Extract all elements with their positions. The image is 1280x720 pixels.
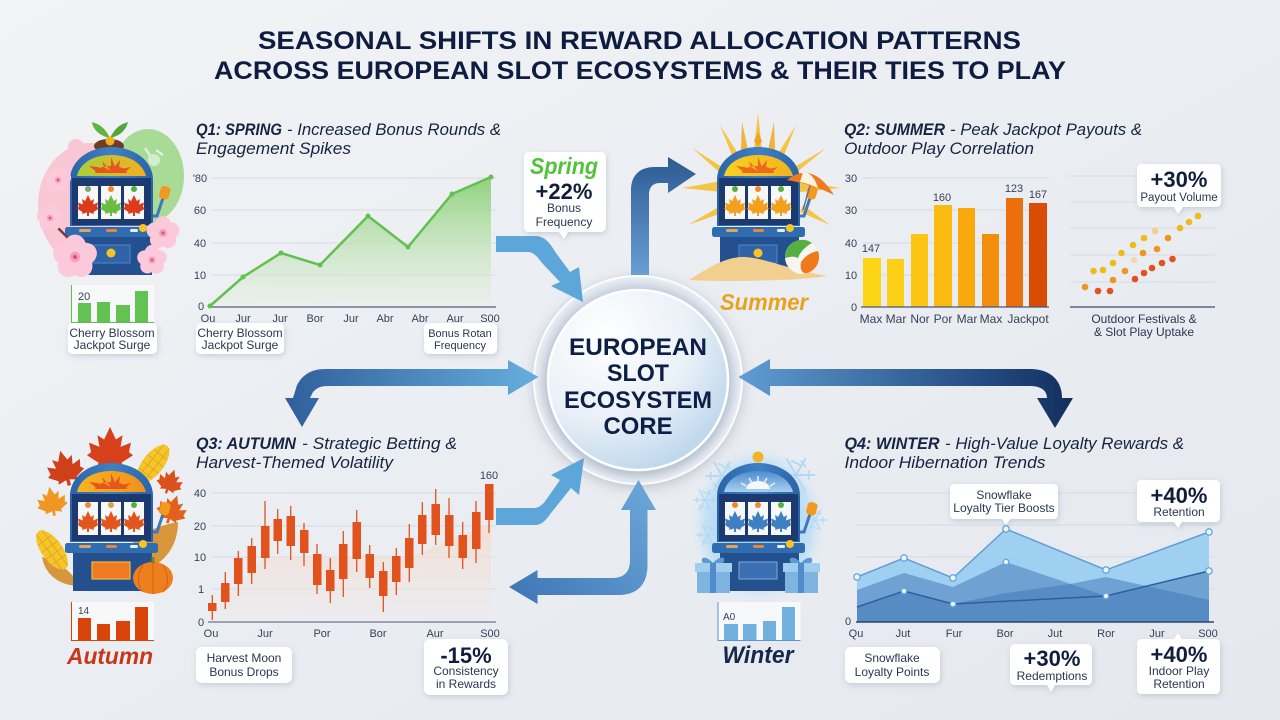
central core circle: ECOSYSTEM — [564, 387, 712, 414]
callout: +40% retention — [1137, 480, 1220, 528]
callout: spring +22%: +22% — [536, 179, 592, 204]
callout: cherry blossom right: Cherry Blossom — [197, 326, 283, 340]
label: Winter: Winter — [722, 642, 795, 669]
chart: autumn mini bars: 14 — [78, 606, 90, 617]
callout: harvest moon: Harvest Moon — [207, 651, 281, 665]
arrow: core to autumn double-headed — [285, 360, 538, 427]
chart: summer bar chart: 40 — [845, 238, 857, 250]
title: ACROSS EUROPEAN SLOT ECOSYSTEMS & THEIR TIES TO PLAY — [214, 57, 1066, 85]
chart: autumn candlesticks: 0 — [198, 617, 204, 629]
callout: -15% consistency: in Rewards — [436, 677, 496, 691]
callout: +30% redemptions: Redemptions — [1017, 669, 1087, 683]
chart: summer bar chart: 123 — [1005, 183, 1023, 195]
central core circle: EUROPEAN — [569, 334, 707, 361]
panel: Q4 winter — [688, 434, 1220, 694]
heading: Q3: Harvest-Themed Volatility — [196, 453, 395, 472]
chart: winter mini bars — [718, 602, 800, 641]
chart: spring line chart: 0 — [198, 301, 204, 313]
callout: snowflake loyalty points — [845, 647, 940, 683]
callout: -15% consistency: -15% — [440, 643, 492, 668]
chart: spring line chart: 60 — [194, 205, 206, 217]
arrow: core to winter double-headed — [738, 359, 1073, 428]
chart: spring mini bars: 20 — [78, 291, 90, 303]
callout: cherry blossom left: Jackpot Surge — [74, 338, 151, 352]
chart: spring line chart: Jur — [272, 313, 288, 325]
chart: autumn candlesticks: 40 — [194, 488, 206, 500]
chart: winter layered area: Bor — [996, 628, 1014, 640]
heading: Q2: - Peak Jackpot Payouts & — [950, 120, 1142, 139]
heading: Q1: Engagement Spikes — [196, 139, 352, 158]
chart: autumn candlesticks: 160 — [480, 470, 498, 482]
callout: snowflake loyalty tier boosts: Snowflake — [976, 488, 1032, 502]
callout: bonus frequency chart label — [424, 323, 497, 354]
chart: spring line chart: 10 — [194, 270, 206, 282]
title — [214, 27, 1066, 85]
chart: summer bar chart: Max — [980, 312, 1002, 326]
chart: autumn candlesticks: S00 — [480, 628, 500, 640]
callout: +30% payout volume — [1137, 164, 1221, 214]
chart: spring line chart — [193, 173, 500, 325]
chart: summer bar chart: 0 — [851, 302, 857, 314]
title: SEASONAL SHIFTS IN REWARD ALLOCATION PATTERNS — [258, 27, 1021, 55]
chart: summer bar chart: 10 — [845, 270, 857, 282]
chart: autumn mini bars — [71, 602, 154, 641]
chart: winter layered area: Qu — [849, 628, 863, 640]
chart: autumn candlesticks: 1 — [198, 584, 204, 596]
chart: autumn candlesticks: 10 — [194, 552, 206, 564]
chart: spring line chart: S00 — [480, 313, 500, 325]
callout: spring +22%: Frequency — [536, 215, 592, 229]
chart: autumn candlesticks: Ou — [204, 628, 218, 640]
chart: autumn candlesticks: Jur — [257, 628, 273, 640]
chart: summer bar chart: 147 — [862, 243, 880, 255]
chart: autumn candlesticks: Aur — [426, 628, 444, 640]
chart: summer bar chart: 30 — [845, 173, 857, 185]
callout: +40% indoor play retention: Indoor Play — [1149, 664, 1209, 678]
callout: harvest moon — [196, 647, 292, 683]
chart: summer bar chart: 167 — [1029, 189, 1047, 201]
chart: spring line chart: '80 — [193, 173, 207, 185]
callout: spring +22% — [524, 152, 606, 239]
chart: spring line chart: Jur — [343, 313, 359, 325]
chart: summer bar chart: Mar — [886, 312, 906, 326]
heading: Q2: Q2: SUMMER — [844, 120, 946, 139]
chart: winter layered area: S00 — [1198, 628, 1218, 640]
callout: +40% retention: Retention — [1153, 505, 1205, 519]
chart: winter layered area: Ror — [1097, 628, 1115, 640]
arrow: autumn to core — [496, 458, 584, 525]
callout: snowflake loyalty tier boosts: Loyalty Tier Boosts — [953, 501, 1055, 515]
callout: +30% redemptions: +30% — [1024, 646, 1080, 671]
chart: spring line chart: Bor — [306, 313, 324, 325]
callout: bonus frequency chart label: Bonus Rotan — [428, 328, 492, 340]
chart: winter layered area: Jut — [1048, 628, 1062, 640]
chart: winter layered area: Jur — [1149, 628, 1165, 640]
label: Summer: Summer — [720, 289, 809, 315]
callout: spring +22%: Spring — [530, 153, 598, 179]
chart: winter mini bars: A0 — [723, 612, 736, 623]
panel: Q3 autumn — [30, 427, 508, 695]
heading: Q3: Q3: AUTUMN — [196, 434, 297, 453]
heading: Q4 — [844, 434, 1184, 472]
central core circle: SLOT — [607, 360, 669, 387]
callout: cherry blossom right: Jackpot Surge — [202, 338, 279, 352]
heading: Q4: Q4: WINTER — [844, 434, 940, 453]
chart: summer bar chart: Max — [860, 312, 882, 326]
heading: Q1: - Increased Bonus Rounds & — [287, 120, 501, 139]
icon: winter slot machine — [688, 443, 828, 607]
icon: spring slot machine — [35, 122, 184, 282]
arrow: spring to core — [496, 236, 583, 302]
callout: +40% indoor play retention: +40% — [1151, 642, 1207, 667]
heading: Q2: Outdoor Play Correlation — [844, 139, 1034, 158]
chart: spring line chart: Abr — [411, 313, 429, 325]
chart: spring line chart: Ou — [201, 313, 215, 325]
callout: -15% consistency: Consistency — [433, 664, 499, 678]
callout: +40% indoor play retention: Retention — [1153, 677, 1205, 691]
chart: outdoor festivals scatter — [1070, 176, 1215, 339]
panel: Q1 spring — [35, 120, 501, 354]
chart: spring line chart: Jur — [235, 313, 251, 325]
chart: winter layered area: Fur — [946, 628, 963, 640]
chart: spring line chart: Aur — [446, 313, 464, 325]
panel: Q2 summer — [682, 113, 1221, 339]
callout: snowflake loyalty points: Snowflake — [864, 651, 920, 665]
chart: winter layered area — [845, 493, 1218, 640]
chart: summer bar chart: Jackpot — [1007, 312, 1049, 326]
chart: autumn candlesticks: Por — [313, 628, 331, 640]
chart: spring line chart: Abr — [376, 313, 394, 325]
heading: Q2 — [844, 120, 1142, 158]
callout: cherry blossom left: Cherry Blossom — [69, 326, 155, 340]
core outer ring — [534, 276, 742, 484]
callout: +30% payout volume: Payout Volume — [1140, 192, 1218, 204]
callout: snowflake loyalty points: Loyalty Points — [855, 665, 929, 679]
central core circle: CORE — [604, 413, 672, 440]
callout: snowflake loyalty tier boosts — [950, 484, 1058, 525]
callout: +30% payout volume: +30% — [1151, 167, 1207, 192]
chart: summer bar chart: 30 — [845, 205, 857, 217]
chart: summer bar chart: Nor — [910, 312, 930, 326]
chart: spring mini bars — [71, 285, 154, 323]
callout: +30% redemptions — [1010, 644, 1092, 692]
arrow: core to summer — [631, 157, 696, 275]
heading: Q1 — [196, 120, 501, 158]
chart: outdoor festivals scatter: & Slot Play Uptake — [1094, 325, 1194, 339]
chart: winter layered area: Jut — [896, 628, 910, 640]
chart: winter layered area: 0 — [845, 616, 851, 628]
heading: Q3: - Strategic Betting & — [302, 434, 457, 453]
arrow: winter and core double-headed — [509, 480, 656, 604]
callout: bonus frequency chart label: Frequency — [434, 340, 486, 352]
icon: summer slot machine — [682, 113, 840, 281]
chart: autumn candlesticks — [194, 470, 500, 640]
heading: Q4: - High-Value Loyalty Rewards & — [945, 434, 1184, 453]
chart: spring line chart: 40 — [194, 238, 206, 250]
heading: Q3 — [196, 434, 457, 472]
callout: harvest moon: Bonus Drops — [209, 665, 279, 679]
chart: autumn candlesticks: Bor — [369, 628, 387, 640]
chart: outdoor festivals scatter: Outdoor Festivals & — [1091, 312, 1197, 326]
chart: summer bar chart: Por — [934, 312, 952, 326]
callout: +40% retention: +40% — [1151, 483, 1207, 508]
chart: autumn candlesticks: 20 — [194, 521, 206, 533]
callout: -15% consistency — [424, 639, 508, 695]
callout: spring +22%: Bonus — [547, 201, 581, 215]
callout: +40% indoor play retention — [1137, 633, 1220, 694]
heading: Q4: Indoor Hibernation Trends — [844, 453, 1046, 472]
label: Autumn: Autumn — [66, 643, 153, 669]
callout: cherry blossom right — [196, 323, 284, 354]
heading: Q1: Q1: SPRING — [196, 120, 282, 139]
central core circle — [548, 290, 728, 470]
chart: summer bar chart — [845, 173, 1049, 326]
chart: summer bar chart: Mar — [957, 312, 977, 326]
callout: cherry blossom left — [68, 323, 157, 354]
icon: autumn slot machine — [30, 427, 192, 594]
chart: summer bar chart: 160 — [933, 192, 951, 204]
